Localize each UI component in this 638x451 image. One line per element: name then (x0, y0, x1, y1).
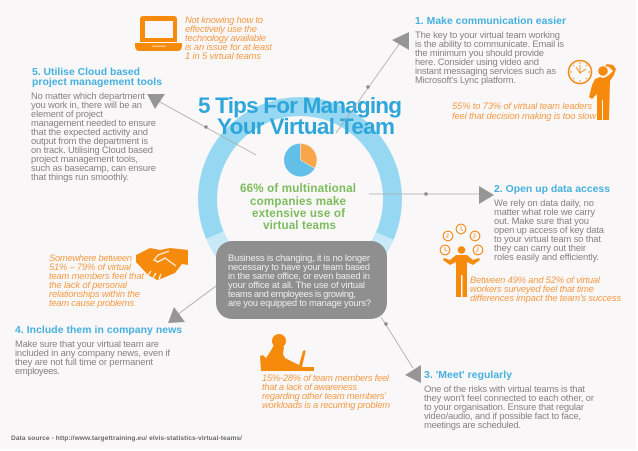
callout: technology: technology available (185, 32, 266, 43)
callout: technology: 1 in 5 virtual teams (185, 50, 261, 61)
icon: man juggling clocks (440, 224, 483, 297)
statistic: multinational companies: virtual teams (263, 219, 336, 232)
callout: personal relationships: Somewhere between (49, 252, 132, 263)
panel: intro box: in the same office, or even based in (228, 270, 370, 281)
panel: tip 4: Make sure that your virtual team are (15, 338, 159, 349)
panel: tip 5: management needed to ensure (31, 117, 156, 128)
callout: technology: is an issue for at least (185, 41, 272, 52)
callout: personal relationships: the lack of personal (49, 279, 128, 290)
callout: personal relationships: team members feel that (49, 270, 144, 281)
arrow: to tip 1 (336, 32, 409, 133)
panel: tip 2: out. Make sure that you (494, 215, 589, 226)
central ring (208, 106, 392, 292)
callout: lack of awareness: 15%-28% of team members feel (262, 372, 390, 383)
callout: time differences: differences impact the team's success (470, 292, 621, 303)
panel: tip 3: they won't feel connected to each other, or (424, 392, 594, 403)
callout: lack of awareness: workloads is a recurring problem (262, 399, 390, 410)
panel: tip 5: 5. Utilise Cloud based (32, 67, 140, 78)
panel: intro box (216, 241, 387, 319)
panel: tip 3: to your organisation. Ensure that regular (424, 401, 584, 412)
panel: intro box: Business is changing, it is no longer (228, 252, 370, 263)
arrow: to tip 4 (168, 286, 216, 323)
data source: Data source - http://www.targettraining.eu/ elvis-statistics-virtual-teams/ (11, 435, 242, 442)
panel: tip 4: they are not full time or permanent (15, 356, 153, 367)
panel: tip 3 (424, 370, 594, 430)
pie chart: 66 percent (284, 144, 317, 176)
icon: laptop (135, 16, 182, 51)
panel: tip 2: 2. Open up data access (494, 184, 610, 195)
statistic: multinational companies: extensive use of (252, 207, 345, 220)
callout: decision making: feel that decision making is too slow (452, 110, 597, 121)
statistic: multinational companies (240, 182, 356, 232)
callout: technology: Not knowing how to (185, 14, 263, 25)
panel: tip 2: We rely on data daily, no (494, 197, 594, 208)
title: Your Virtual Team (217, 114, 395, 139)
panel: tip 3: video/audio, and if possible fact to face, (424, 410, 581, 421)
callout: personal relationships: 51% – 79% of virtual (49, 261, 132, 272)
callout: time differences (470, 274, 621, 303)
callout: lack of awareness: regarding other team members' (262, 390, 387, 401)
callout: lack of awareness (262, 372, 390, 410)
panel: intro box: necessary to have your team based (228, 261, 370, 272)
panel: tip 3: 3. 'Meet' regularly (424, 370, 512, 381)
panel: tip 1 (415, 16, 566, 85)
panel: tip 5 (31, 67, 162, 182)
panel: tip 4 (15, 325, 182, 376)
callout: time differences: workers surveyed feel that time (470, 283, 594, 294)
panel: tip 3: meetings are scheduled. (424, 419, 521, 430)
panel: tip 2: to your virtual team so that (494, 233, 601, 244)
panel: tip 3: One of the risks with virtual teams is that (424, 383, 585, 394)
panel: tip 4: 4. Include them in company news (15, 325, 182, 336)
icon: handshake (136, 248, 188, 280)
panel: intro box: your office at all. The use of virtual (228, 279, 365, 290)
callout: time differences: Between 49% and 52% of virtual (470, 274, 601, 285)
panel: tip 2: open up access of key data (494, 224, 605, 235)
statistic: multinational companies: companies make (250, 195, 347, 208)
arrow: to tip 3 (381, 317, 421, 383)
callout: personal relationships: team cause problems (49, 297, 134, 308)
title: 5 Tips For Managing (198, 93, 402, 118)
panel: tip 5: project management tools, (31, 153, 138, 164)
arrow: to tip 2 (369, 186, 494, 204)
callout: technology (185, 14, 272, 61)
panel: tip 2: matter what role we carry (494, 206, 595, 217)
callout: personal relationships: relationships within the (49, 288, 140, 299)
panel: tip 5: output from the department is (31, 135, 148, 146)
statistic: multinational companies: 66% of multinational (240, 182, 356, 195)
panel: tip 5: that the expected activity and (31, 126, 148, 137)
arrow: to tip 5 (147, 94, 256, 155)
callout: technology: effectively use the (185, 23, 257, 34)
icon: clock and thinking man (568, 60, 616, 120)
panel: tip 1: 1. Make communication easier (415, 16, 566, 27)
panel: tip 1: the minimum you should provide (415, 47, 544, 58)
panel: tip 5: that things run smoothly. (31, 171, 129, 182)
panel: tip 4: employees. (15, 365, 60, 376)
panel: tip 1: Microsoft's Lync platform. (415, 74, 516, 85)
panel: tip 5: No matter which department (31, 90, 145, 101)
panel: tip 1: is the ability to communicate. Email is (415, 38, 564, 49)
panel: intro box: teams and employees is growing, (228, 288, 356, 299)
title (198, 93, 402, 139)
panel: tip 5: you work in, there will be an (31, 99, 142, 110)
panel: tip 1: The key to your virtual team working (415, 29, 560, 40)
panel: tip 5: such as basecamp, can ensure (31, 162, 156, 173)
panel: tip 5: on track. Utilising Cloud based (31, 144, 153, 155)
callout: decision making (452, 100, 597, 121)
panel: tip 2: roles easily and efficiently. (494, 251, 599, 262)
panel: tip 2 (494, 184, 610, 262)
callout: decision making: 55% to 73% of virtual team leaders (452, 100, 592, 111)
panel: tip 4: included in any company news, even if (15, 347, 170, 358)
panel: intro box: are you equipped to manage yours? (228, 297, 371, 308)
panel: tip 5: project management tools (32, 77, 162, 88)
panel: tip 5: element of project (31, 108, 103, 119)
panel: tip 1: here. Consider using video and (415, 56, 539, 67)
panel: tip 2: they can carry out their (494, 242, 586, 253)
icon: person at laptop (260, 334, 314, 371)
callout: lack of awareness: that a lack of awareness (262, 381, 357, 392)
callout: personal relationships (49, 252, 144, 308)
panel: tip 1: instant messaging services such as (415, 65, 556, 76)
